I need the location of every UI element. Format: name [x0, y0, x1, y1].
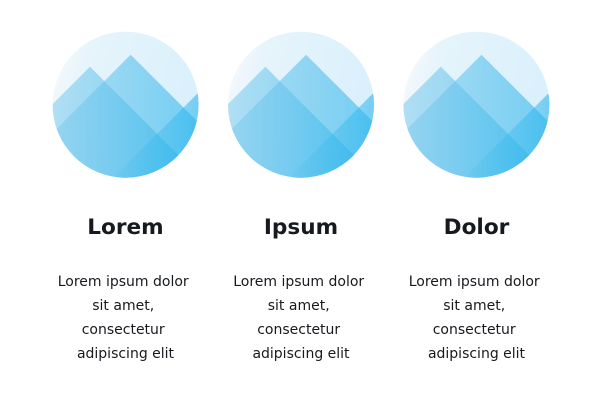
panel: Lorem: [58, 215, 189, 362]
icon: mountain circle 1: [52, 32, 199, 178]
text block: Dolor: consectetur: [433, 322, 516, 338]
text block: Ipsum: consectetur: [257, 322, 340, 338]
text block: Dolor: sit amet,: [443, 298, 505, 314]
heading: Lorem: Lorem: [87, 215, 164, 240]
heading: Ipsum: Ipsum: [264, 215, 338, 240]
text block: Lorem: [58, 274, 189, 362]
text block: Lorem: adipiscing elit: [77, 346, 174, 362]
text block: Ipsum: [233, 274, 364, 362]
text block: Dolor: adipiscing elit: [428, 346, 525, 362]
panel: Ipsum: [233, 215, 364, 362]
text block: Dolor: Lorem ipsum dolor: [409, 274, 540, 290]
text block: Ipsum: adipiscing elit: [252, 346, 350, 362]
icon: mountain circle 2: [228, 32, 374, 178]
text block: Ipsum: Lorem ipsum dolor: [233, 274, 364, 290]
panel: Dolor: [409, 215, 540, 362]
text block: Dolor: [409, 274, 540, 362]
text block: Lorem: sit amet,: [92, 298, 154, 314]
text block: Lorem: consectetur: [82, 322, 165, 338]
icon: mountain circle 3: [403, 32, 550, 178]
icons: three mountain circles: [52, 32, 550, 178]
heading: Dolor: Dolor: [444, 215, 509, 240]
text block: Ipsum: sit amet,: [268, 298, 330, 314]
text block: Lorem: Lorem ipsum dolor: [58, 274, 189, 290]
